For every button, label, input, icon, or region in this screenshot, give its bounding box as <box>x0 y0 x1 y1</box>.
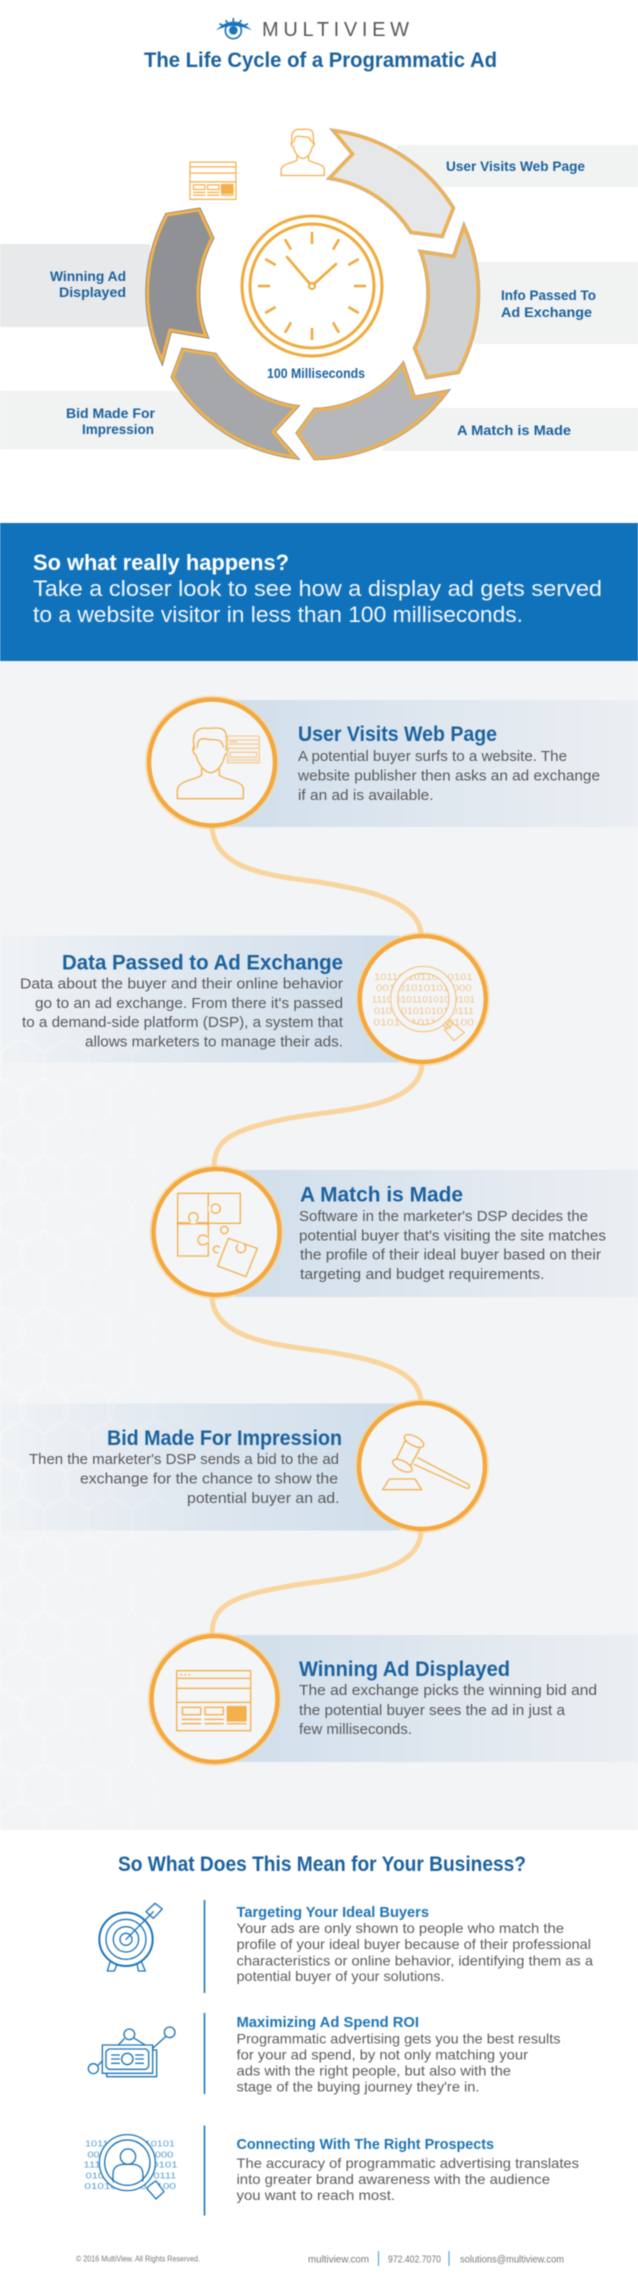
text block: to a demand-side platform (DSP), a system that <box>22 1015 343 1031</box>
heading: Winning Ad Displayed <box>299 1657 510 1681</box>
icon: gavel <box>383 1432 469 1490</box>
label: a match is made: A Match is Made <box>457 422 571 438</box>
icon: magnifier over profile and binary data: 001 000000 1000 <box>87 2150 174 2159</box>
arrow: info passed to ad exchange <box>415 227 478 377</box>
icon: clock <box>242 216 382 356</box>
text block <box>297 749 600 804</box>
text block: The ad exchange picks the winning bid and <box>299 1683 597 1699</box>
icon: magnifier over binary data <box>372 966 475 1041</box>
text block <box>236 2030 560 2094</box>
icon: user with web page <box>177 728 259 799</box>
label: info passed to ad exchange <box>501 287 596 320</box>
label: bid made for impression <box>66 405 156 437</box>
circle 2 <box>356 933 489 1065</box>
footer <box>76 2251 564 2266</box>
text block: targeting and budget requirements. <box>300 1267 544 1283</box>
icon: web page <box>190 162 236 199</box>
text block: ads with the right people, but also with the <box>236 2063 511 2079</box>
text block: potential buyer of your solutions. <box>236 1968 444 1984</box>
label: bid made for impression: Impression <box>82 421 154 437</box>
footer: multiview.com <box>308 2253 369 2265</box>
panel: life cycle diagram <box>0 129 638 458</box>
panel: process timeline <box>0 661 638 1830</box>
step 3: a match is made <box>150 1166 606 1298</box>
text block: potential buyer an ad. <box>187 1491 340 1507</box>
footer: solutions@multiview.com <box>460 2253 564 2265</box>
step bars <box>0 700 638 1762</box>
text block: characteristics or online behavior, identifying them as a <box>236 1952 593 1968</box>
icon: target with arrow <box>99 1903 162 1971</box>
text block <box>29 1452 340 1507</box>
footer: 972.402.7070 <box>388 2253 441 2265</box>
icon: money with network <box>88 2027 175 2077</box>
panel: so what really happens banner: Take a closer look to see how a display ad gets served <box>33 576 602 601</box>
step 2: data passed to ad exchange <box>20 933 489 1065</box>
text block: allows marketers to manage their ads. <box>85 1034 343 1050</box>
text block: go to an ad exchange. From there it's passed <box>35 996 343 1012</box>
text block <box>299 1209 606 1283</box>
icon: magnifier over binary data: 1110 0101101010 0101 <box>372 995 475 1005</box>
heading: Connecting With The Right Prospects <box>236 2136 494 2153</box>
footer: © 2016 MultiView. All Rights Reserved. <box>76 2255 200 2264</box>
text block: into greater brand awareness with the audience <box>236 2171 550 2187</box>
text block: Software in the marketer's DSP decides the <box>299 1209 588 1225</box>
panel: so what really happens banner <box>0 523 638 661</box>
text block: Programmatic advertising gets you the best results <box>236 2030 560 2046</box>
icon: magnifier over profile and binary data: 01010 0000 0100 <box>84 2182 177 2191</box>
text block <box>236 2155 579 2203</box>
icon: magnifier over binary data: 001 01010101 000 <box>376 983 472 993</box>
panel: connecting with the right prospects <box>83 2126 579 2216</box>
text block: if an ad is available. <box>298 788 434 804</box>
label: winning ad displayed <box>50 268 126 300</box>
circle 3 <box>150 1166 283 1298</box>
arrow: a match is made <box>298 365 446 458</box>
text block: the profile of their ideal buyer based on their <box>300 1248 601 1264</box>
panel: targeting your ideal buyers <box>99 1900 593 1993</box>
icon: magnifier over binary data: 10110 10110 10101 <box>374 972 473 982</box>
text block <box>20 977 343 1050</box>
arrow: user visits web page <box>330 131 453 236</box>
title: The Life Cycle of a Programmatic Ad <box>144 48 497 72</box>
icon: puzzle pieces <box>178 1193 257 1277</box>
text block: A potential buyer surfs to a website. The <box>298 749 567 765</box>
panel: so what really happens banner: So what really happens? <box>33 550 289 575</box>
text block: potential buyer that's visiting the site matches <box>299 1228 606 1244</box>
label: winning ad displayed: Winning Ad <box>50 268 126 284</box>
icon: magnifier over binary data: 01010 10110 0100 <box>373 1018 474 1028</box>
heading: Bid Made For Impression <box>107 1426 342 1450</box>
text block: The accuracy of programmatic advertising translates <box>236 2155 579 2171</box>
heading: Data Passed to Ad Exchange <box>62 951 343 975</box>
icon: magnifier over profile and binary data <box>83 2135 178 2199</box>
text block: profile of your ideal buyer because of their professional <box>236 1936 591 1952</box>
heading: A Match is Made <box>300 1182 463 1206</box>
text block: for your ad spend, by not only matching your <box>236 2047 528 2063</box>
label: 100 milliseconds: 100 Milliseconds <box>267 365 365 381</box>
heading: so what does this mean: So What Does This Mean for Your Business? <box>118 1852 526 1876</box>
step 5: winning ad displayed <box>148 1633 597 1765</box>
label: user visits web page: User Visits Web Page <box>446 158 585 174</box>
panel: so what really happens banner: to a website visitor in less than 100 milliseconds. <box>33 602 523 627</box>
logo: MultiView: MULTIVIEW <box>262 19 409 41</box>
icon: magnifier over profile and binary data: 10110 0000 10101 <box>85 2140 176 2149</box>
label: bid made for impression: Bid Made For <box>66 405 156 421</box>
icon: magnifier over binary data: 0100 01010101 0111 <box>374 1006 474 1016</box>
heading: User Visits Web Page <box>298 722 497 746</box>
arrow: winning ad displayed <box>148 210 212 360</box>
text block: Data about the buyer and their online behavior <box>20 977 343 993</box>
icon: user <box>281 129 324 175</box>
text block: you want to reach most. <box>236 2187 395 2203</box>
label: info passed to ad exchange: Info Passed To <box>501 287 596 303</box>
icon: magnifier over profile and binary data: 0100 000000 0111 <box>86 2171 177 2180</box>
label bar backgrounds <box>0 145 638 451</box>
label: info passed to ad exchange: Ad Exchange <box>501 304 592 320</box>
arrow: bid made for impression <box>173 350 296 457</box>
text block: website publisher then asks an ad exchange <box>297 768 600 784</box>
text block <box>236 1920 593 1984</box>
text block: the potential buyer sees the ad in just a <box>299 1703 566 1719</box>
circle 5 <box>148 1633 281 1765</box>
icon: web page with ad <box>177 1671 251 1731</box>
text block: exchange for the chance to show the <box>80 1472 338 1488</box>
panel: maximizing ad spend ROI <box>88 2013 561 2094</box>
text block: stage of the buying journey they're in. <box>236 2078 480 2094</box>
text block: Then the marketer's DSP sends a bid to the ad <box>29 1452 339 1468</box>
icon: magnifier over profile and binary data: 1110 000000 0101 <box>83 2161 178 2170</box>
step 1: user visits web page <box>146 696 600 829</box>
circle 4 <box>356 1400 488 1532</box>
heading: Maximizing Ad Spend ROI <box>236 2014 419 2031</box>
text block: Your ads are only shown to people who match the <box>236 1920 564 1936</box>
label: winning ad displayed: Displayed <box>59 284 126 300</box>
text block: few milliseconds. <box>299 1722 412 1738</box>
connector curves <box>212 826 422 1635</box>
heading: Targeting Your Ideal Buyers <box>236 1904 429 1921</box>
circle 1 <box>146 696 278 829</box>
step 4: bid made for impression <box>29 1400 488 1532</box>
text block <box>299 1683 597 1738</box>
